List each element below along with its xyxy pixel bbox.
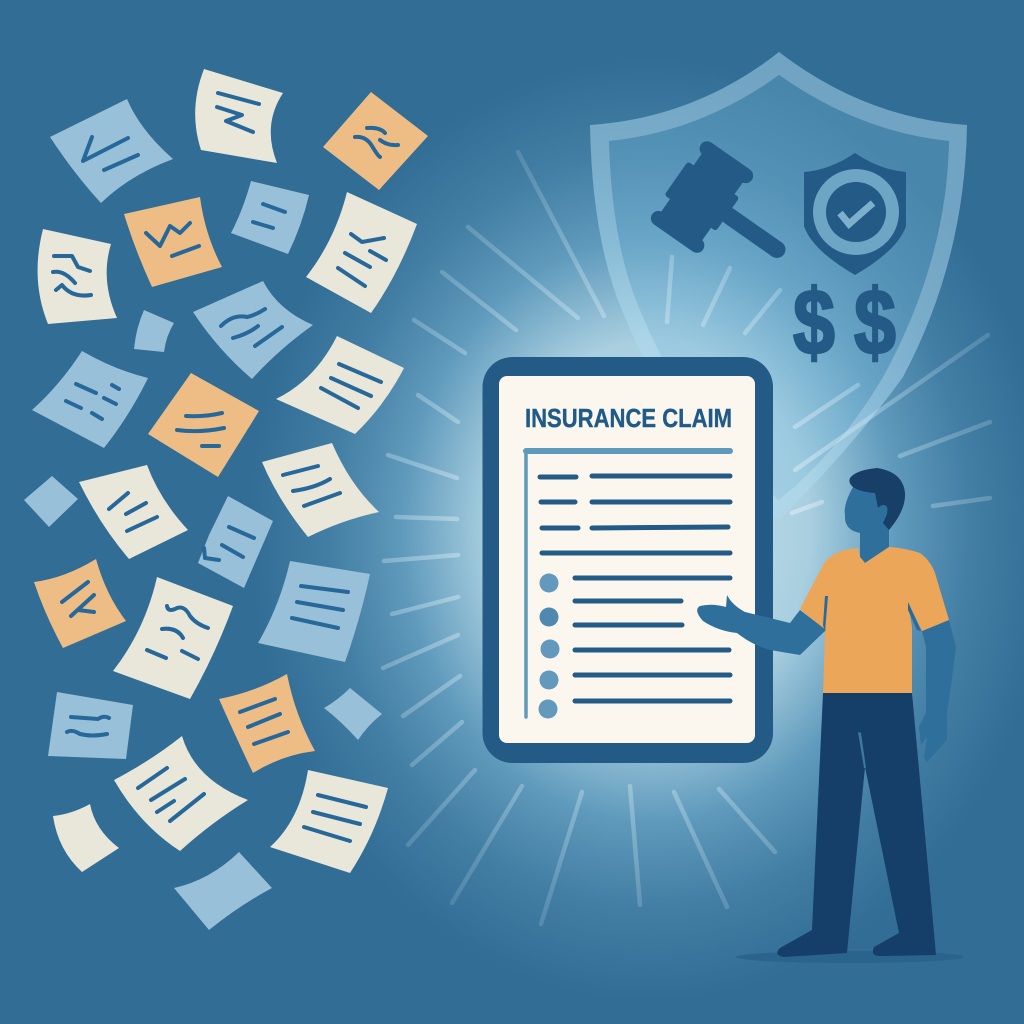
icon: small shield with check bbox=[804, 153, 906, 275]
paper: white sheet 24 bbox=[270, 770, 388, 873]
paper: white sheet 23 bbox=[114, 736, 248, 851]
paper: white sheet 16 bbox=[262, 443, 379, 537]
right arm bbox=[919, 620, 956, 762]
paper: blue scrap 26 bbox=[174, 852, 272, 930]
paper: blue sheet 1 bbox=[50, 99, 173, 203]
paper: orange sheet 17 bbox=[34, 559, 126, 648]
header rule bbox=[526, 448, 730, 454]
ear bbox=[878, 505, 887, 522]
radiating light rays bbox=[383, 152, 990, 924]
insurance claim document tablet bbox=[482, 357, 773, 763]
neck and face bbox=[845, 487, 889, 563]
paper: blue folded sheet 15 bbox=[198, 496, 273, 588]
paper: white sheet 2 bbox=[195, 69, 283, 163]
paper: white sheet 7 bbox=[38, 229, 117, 324]
paper: white scrap 25 bbox=[53, 804, 119, 872]
paper: white sheet 6 bbox=[306, 192, 417, 313]
document title: INSURANCE CLAIM bbox=[525, 403, 732, 433]
paper: blue sheet 9 bbox=[193, 281, 313, 379]
paper: blue sheet 11 bbox=[32, 351, 148, 448]
document page bbox=[499, 376, 755, 743]
paper: blue sheet 22 bbox=[48, 692, 133, 759]
paper: blue diamond scrap 13 bbox=[24, 476, 78, 527]
trouser inseam bbox=[858, 732, 866, 768]
paper: orange sheet 12 bbox=[148, 373, 259, 477]
icon: dollar signs bbox=[793, 269, 896, 374]
paper: orange sheet 20 bbox=[219, 674, 315, 773]
margin rule bbox=[524, 451, 528, 717]
paper: white sheet 10 bbox=[276, 336, 404, 434]
paper: orange sheet 3 bbox=[323, 92, 428, 190]
person pointing at the document bbox=[697, 468, 964, 963]
paper: blue sheet 4 bbox=[231, 181, 309, 254]
trousers bbox=[777, 693, 936, 957]
ground shadow bbox=[736, 951, 964, 963]
icon: dollar signs: $ bbox=[793, 269, 835, 374]
text lines bbox=[540, 476, 730, 701]
icon: gavel bbox=[647, 138, 813, 295]
paper: small blue scrap 8 bbox=[134, 310, 174, 352]
paper: white sheet 14 bbox=[79, 465, 188, 559]
paper: orange sheet 5 bbox=[124, 197, 222, 287]
icon: dollar signs: $ bbox=[854, 269, 896, 374]
bullet dots bbox=[538, 574, 560, 718]
large background shield bbox=[590, 52, 967, 520]
extended arm bbox=[697, 595, 826, 655]
hair bbox=[849, 468, 905, 530]
paper: blue diamond scrap 21 bbox=[324, 688, 382, 740]
paper: blue sheet 19 bbox=[258, 561, 370, 662]
paper: white sheet 18 bbox=[113, 577, 233, 699]
shirt fold marks bbox=[823, 596, 921, 632]
orange t-shirt bbox=[800, 547, 949, 693]
